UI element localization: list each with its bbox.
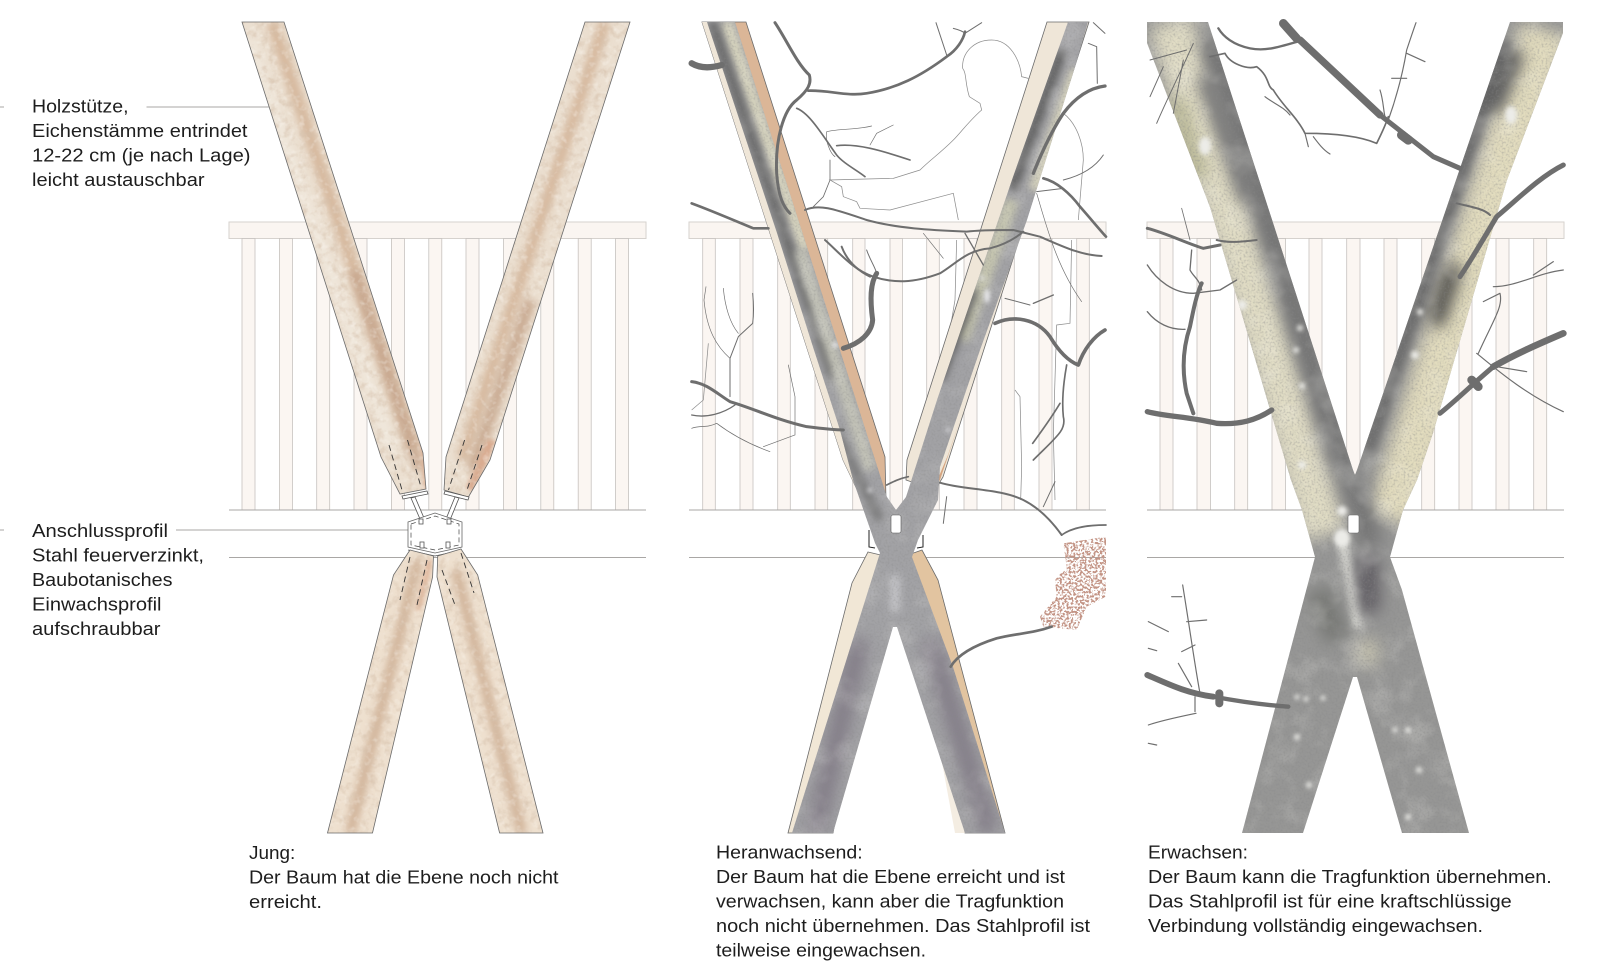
outline: human figure	[692, 40, 1083, 500]
label: Holzstütze: leicht austauschbar	[32, 169, 204, 190]
label: Holzstütze: Holzstütze,	[32, 96, 128, 116]
caption: Jung: Der Baum hat die Ebene noch nicht	[249, 866, 558, 888]
label: Anschlussprofil: Stahl feuerverzinkt,	[32, 544, 204, 566]
caption: Heranwachsend	[716, 842, 1090, 960]
caption: Erwachsen: Verbindung vollständig eingewachsen.	[1148, 915, 1483, 936]
steel connector profile	[402, 491, 469, 556]
branch with autumn leaves	[940, 482, 1106, 667]
caption: Erwachsen: Erwachsen:	[1148, 842, 1248, 862]
label: Holzstütze: 12-22 cm (je nach Lage)	[32, 144, 250, 166]
caption: Heranwachsend: Heranwachsend:	[716, 842, 863, 862]
branches: upper part	[692, 23, 1106, 485]
caption: Heranwachsend: verwachsen, kann aber die Tragfunktion	[716, 890, 1064, 912]
timber post: lower left	[327, 550, 434, 834]
timber post: upper right	[440, 15, 640, 505]
timber post: lower right	[436, 548, 544, 834]
caption: Jung: erreicht.	[249, 891, 322, 912]
railing: growing stage	[689, 222, 1106, 558]
panel: Heranwachsend	[689, 15, 1106, 960]
label: Anschlussprofil: Baubotanisches	[32, 569, 172, 590]
caption: Erwachsen: Das Stahlprofil ist für eine kraftschlüssige	[1148, 890, 1512, 912]
caption: Heranwachsend: noch nicht übernehmen. Das Stahlprofil ist	[716, 915, 1090, 936]
caption: Jung: Jung:	[249, 842, 295, 863]
label: Holzstütze: Eichenstämme entrindet	[32, 120, 248, 141]
railing: young stage	[229, 222, 646, 558]
trunk: fully grown tree X	[1140, 15, 1570, 840]
label: Anschlussprofil: Einwachsprofil	[32, 594, 162, 614]
timber post: upper left	[242, 22, 426, 494]
exposed timber behind the growing tree	[702, 22, 1089, 833]
bark: ingrown tree X	[690, 15, 1100, 840]
label: Holzstütze	[0, 96, 269, 190]
panel: Erwachsen	[1140, 15, 1570, 936]
caption: Heranwachsend: Der Baum hat die Ebene erreicht und ist	[716, 866, 1065, 887]
caption: Erwachsen	[1148, 842, 1552, 936]
label: Anschlussprofil: aufschraubbar	[32, 618, 160, 639]
label: Anschlussprofil: Anschlussprofil	[32, 520, 168, 541]
panel: Jung	[229, 15, 646, 912]
caption: Heranwachsend: teilweise eingewachsen.	[716, 940, 926, 960]
caption: Jung	[249, 842, 558, 912]
railing: mature stage	[1147, 222, 1564, 558]
caption: Erwachsen: Der Baum kann die Tragfunktion übernehmen.	[1148, 866, 1552, 887]
branch: lower left stub	[1147, 585, 1288, 745]
label: Anschlussprofil	[0, 520, 408, 639]
branches: mature tree	[1147, 23, 1563, 424]
